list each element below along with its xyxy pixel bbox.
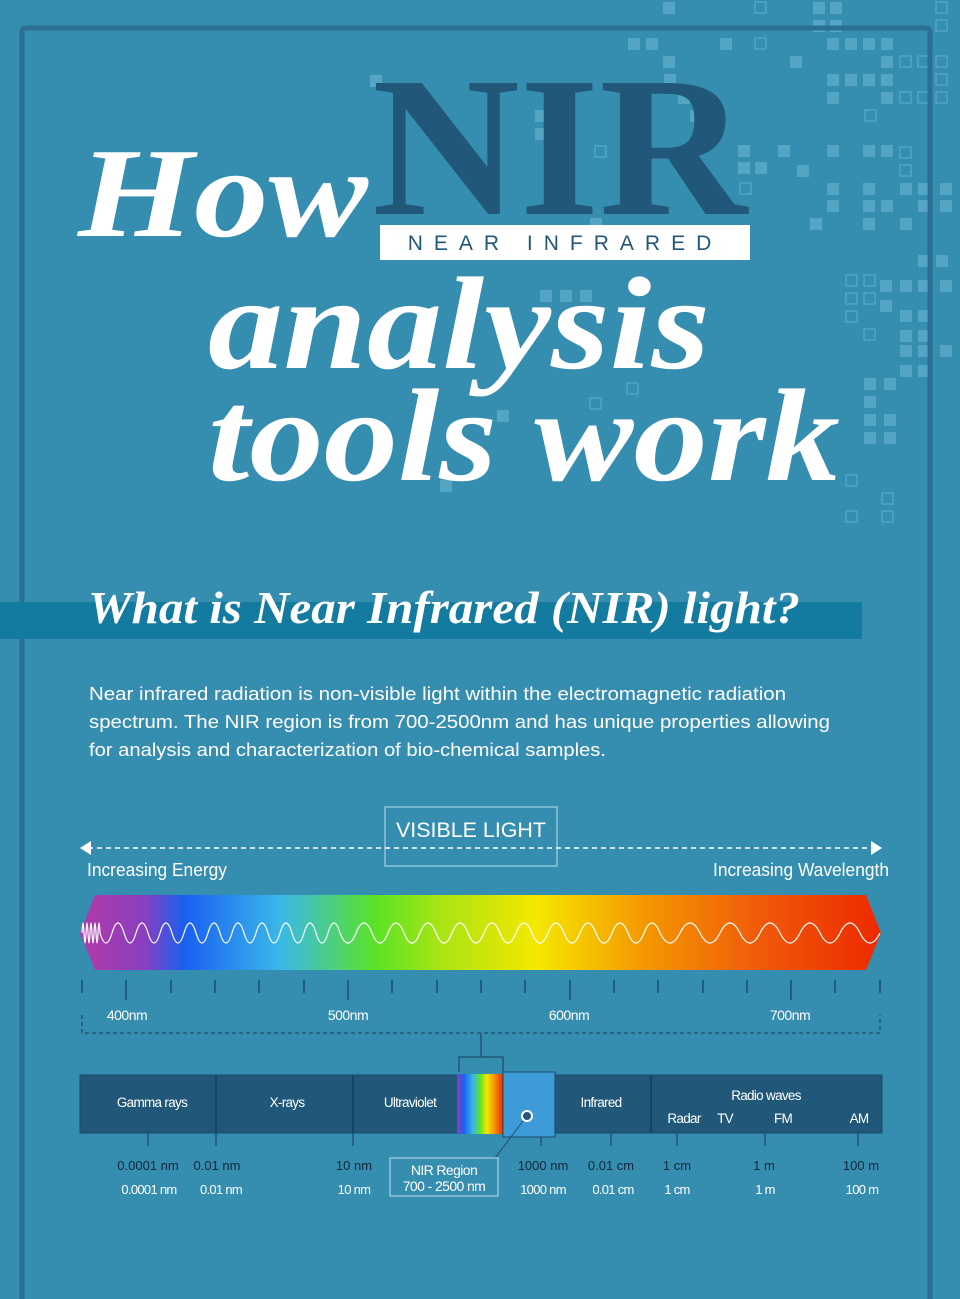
wavelength values: 1000 nm bbox=[518, 1158, 568, 1173]
wavelength values: 1 m bbox=[753, 1158, 775, 1173]
visible light label box bbox=[385, 807, 557, 866]
wavelength values: 100 m bbox=[843, 1158, 879, 1173]
text: 0.0001 nm bbox=[121, 1182, 177, 1197]
wavelength labels: 700nm bbox=[770, 1007, 810, 1023]
intro paragraph bbox=[89, 683, 830, 760]
electromagnetic spectrum bar bbox=[80, 1072, 882, 1158]
text: 100 m bbox=[846, 1182, 878, 1197]
wavelength values: 0.01 nm bbox=[194, 1158, 240, 1173]
intro paragraph: for analysis and characterization of bio-chemical samples. bbox=[89, 739, 606, 760]
NIR region callout: NIR Region bbox=[411, 1162, 477, 1178]
visible spectrum band with wave bbox=[80, 895, 881, 970]
electromagnetic spectrum bar: Infrared bbox=[581, 1095, 622, 1110]
lower ticks bbox=[148, 1133, 858, 1146]
text: 10 nm bbox=[338, 1182, 370, 1197]
arrow: energy/wavelength bbox=[80, 841, 882, 855]
NIR region callout bbox=[390, 1158, 498, 1196]
intro paragraph: Near infrared radiation is non-visible light within the electromagnetic radiation bbox=[89, 683, 786, 704]
electromagnetic spectrum bar: Radio waves bbox=[731, 1088, 802, 1103]
heading band bbox=[0, 582, 862, 639]
wavelength scale ticks bbox=[82, 980, 880, 1000]
electromagnetic spectrum bar: Radar bbox=[667, 1111, 702, 1126]
wavelength labels: 600nm bbox=[549, 1007, 589, 1023]
text: 0.01 nm bbox=[200, 1182, 242, 1197]
wavelength values: 1 cm bbox=[663, 1158, 691, 1173]
electromagnetic spectrum bar: X-rays bbox=[270, 1095, 305, 1110]
title: How: How bbox=[77, 122, 369, 264]
electromagnetic spectrum bar: Ultraviolet bbox=[384, 1095, 437, 1110]
label: near infrared: NEAR INFRARED bbox=[408, 232, 722, 255]
label: increasing energy: Increasing Energy bbox=[87, 860, 227, 880]
text: 1 m bbox=[755, 1182, 775, 1197]
text: 1000 nm bbox=[520, 1182, 566, 1197]
heading band: What is Near Infrared (NIR) light? bbox=[88, 582, 800, 633]
wavelength labels: 500nm bbox=[328, 1007, 368, 1023]
decorative squares bbox=[370, 2, 952, 492]
electromagnetic spectrum bar: Gamma rays bbox=[117, 1095, 188, 1110]
bracket connector bbox=[82, 1015, 880, 1072]
title: tools work: tools work bbox=[208, 362, 840, 509]
wavelength labels: 400nm bbox=[107, 1007, 147, 1023]
visible light label box: VISIBLE LIGHT bbox=[396, 819, 546, 842]
label: increasing wavelength: Increasing Wavelength bbox=[713, 860, 889, 880]
wavelength labels bbox=[107, 1007, 810, 1023]
wavelength values: 0.01 cm bbox=[588, 1158, 634, 1173]
label: near infrared bbox=[380, 225, 750, 260]
wavelength values bbox=[117, 1158, 879, 1173]
NIR region box bbox=[503, 1072, 555, 1137]
intro paragraph: spectrum. The NIR region is from 700-2500nm and has unique properties allowing bbox=[89, 711, 830, 732]
wavelength values: 0.0001 nm bbox=[117, 1158, 179, 1173]
electromagnetic spectrum bar: TV bbox=[717, 1111, 734, 1126]
wavelength values: 10 nm bbox=[336, 1158, 372, 1173]
title: NIR: NIR bbox=[372, 37, 750, 258]
NIR region callout: 700 - 2500 nm bbox=[403, 1178, 485, 1194]
text: 0.01 cm bbox=[592, 1182, 634, 1197]
text: 1 cm bbox=[664, 1182, 690, 1197]
electromagnetic spectrum bar: AM bbox=[850, 1111, 869, 1126]
title: analysis: analysis bbox=[208, 250, 710, 397]
electromagnetic spectrum bar: FM bbox=[774, 1111, 792, 1126]
